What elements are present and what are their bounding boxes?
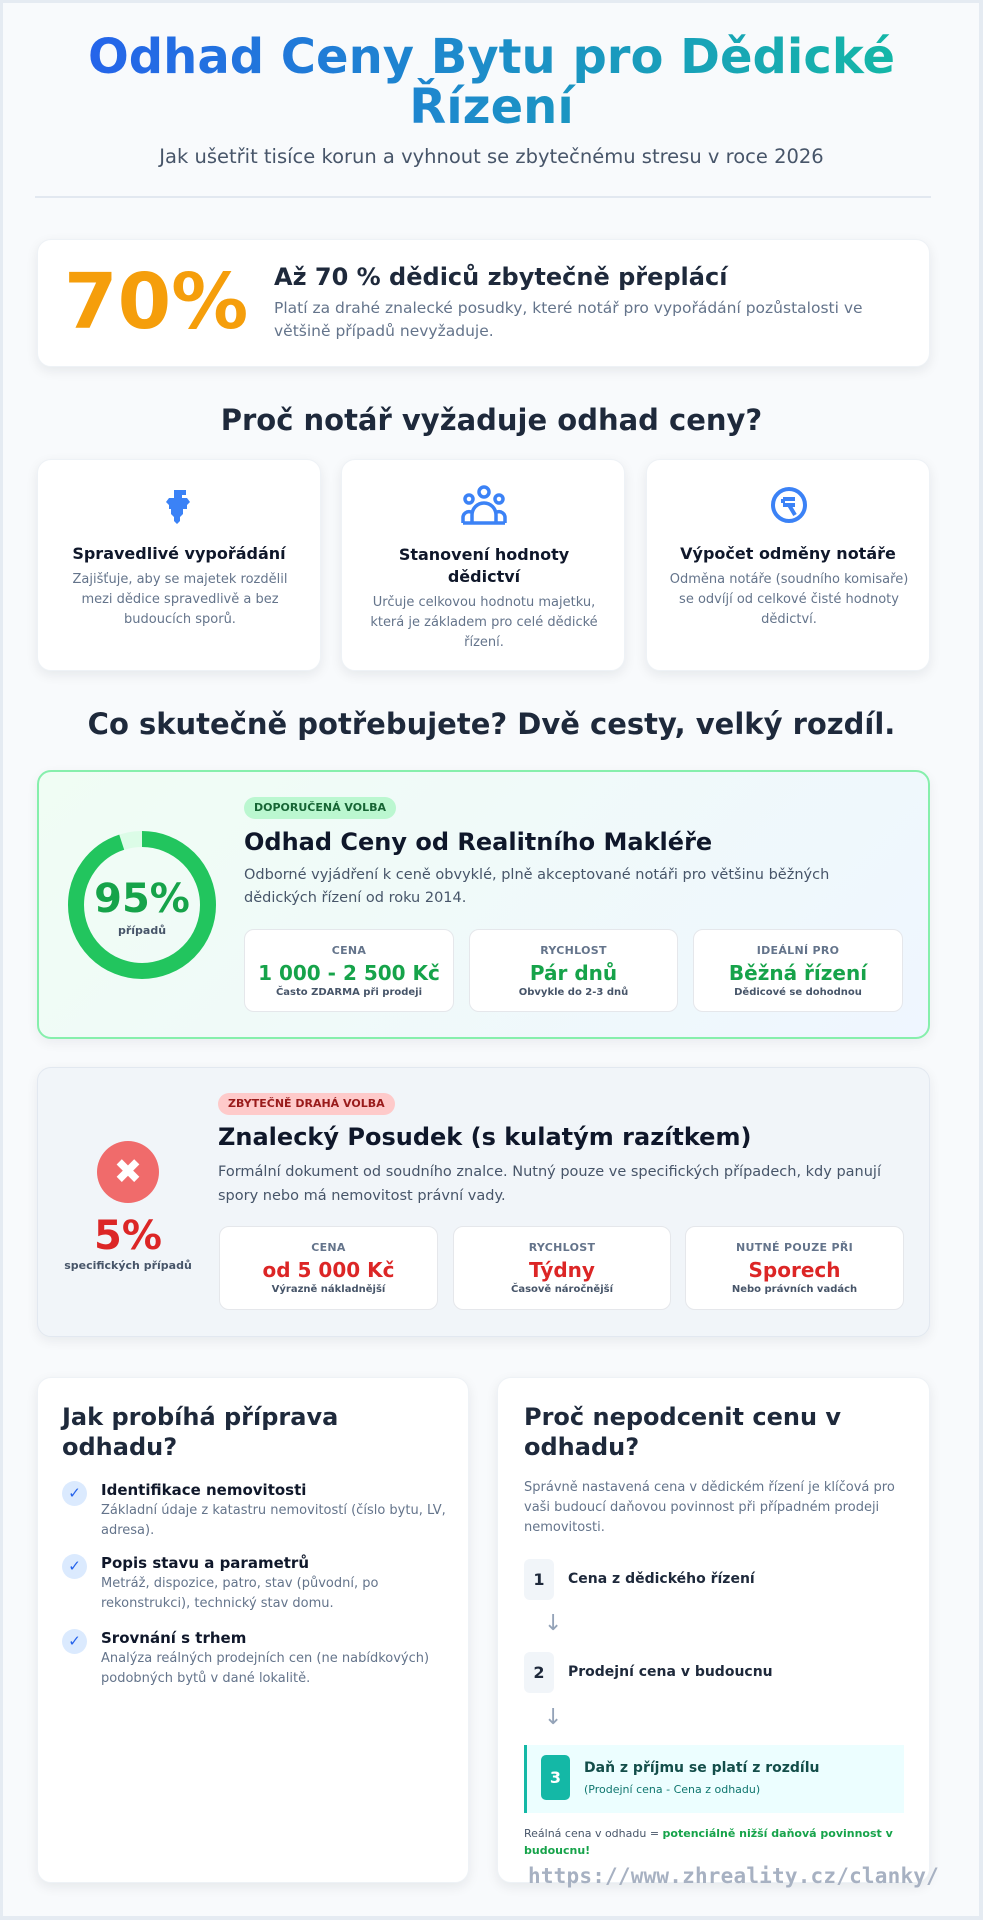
mini: speed: RYCHLOST <box>529 1241 595 1254</box>
card text: Zajišťuje, aby se majetek rozdělil mezi dědice spravedlivě a bez budoucích sporů. <box>73 572 287 627</box>
donut chart 95%: případů <box>118 924 166 937</box>
path text: Odborné vyjádření k ceně obvyklé, plně akceptované notáři pro většinu běžných dědických řízení od roku 2014. <box>244 867 829 906</box>
step 3 highlight: (Prodejní cena - Cena z odhadu) <box>584 1783 760 1796</box>
card title: Stanovení hodnoty dědictví <box>399 545 569 586</box>
item 1: Základní údaje z katastru nemovitostí (číslo bytu, LV, adresa). <box>101 1503 446 1538</box>
panel: expert report (expensive) <box>37 1067 930 1337</box>
stat 5%: specifických případů <box>64 1259 192 1272</box>
mini: ideal for <box>693 929 903 1012</box>
item 2: ✓ <box>68 1557 81 1575</box>
item 3: ✓ <box>68 1632 81 1650</box>
conclusion text: Reálná cena v odhadu = potenciálně nižší daňová povinnost v budoucnu! <box>524 1827 893 1857</box>
heading: why notary: Proč notář vyžaduje odhad ceny? <box>221 403 762 437</box>
badge <box>218 1093 395 1115</box>
mini: price <box>244 929 454 1012</box>
title: Odhad Ceny Bytu pro Dědické Řízení <box>88 29 895 135</box>
donut chart 95%: 95% <box>94 876 190 922</box>
step 3 highlight <box>524 1745 904 1813</box>
item 2: Metráž, dispozice, patro, stav (původní, po rekonstrukci), technický stav domu. <box>101 1576 378 1611</box>
icon: users <box>461 485 507 525</box>
item 3: Srovnání s trhem <box>101 1629 246 1647</box>
mini: ideal for: IDEÁLNÍ PRO <box>757 944 839 957</box>
mini: price: CENA <box>332 944 366 957</box>
panel heading: Jak probíhá příprava odhadu? <box>62 1403 338 1461</box>
panel: fair settlement <box>37 459 321 671</box>
card title: Výpočet odměny notáře <box>680 544 896 563</box>
panel heading: Proč nepodcenit cenu v odhadu? <box>524 1403 841 1461</box>
badge: DOPORUČENÁ VOLBA <box>254 801 386 814</box>
step 1: 1 <box>533 1570 545 1589</box>
panel: value of inheritance <box>341 459 625 671</box>
mini: speed: Pár dnů <box>530 961 617 985</box>
panel: notary fee <box>646 459 930 671</box>
mini: needed: Nebo právních vadách <box>732 1284 857 1295</box>
card text: Odměna notáře (soudního komisaře) se odvíjí od celkové čisté hodnoty dědictví. <box>670 572 908 627</box>
card title: Spravedlivé vypořádání <box>72 544 286 563</box>
badge <box>244 797 396 819</box>
item 1: Identifikace nemovitosti <box>101 1481 306 1499</box>
stat 5% <box>64 1213 192 1272</box>
mini: ideal for: Dědicové se dohodnou <box>734 987 862 998</box>
card text: Určuje celkovou hodnotu majetku, která je základem pro celé dědické řízení. <box>370 595 598 650</box>
mini: speed: RYCHLOST <box>540 944 607 957</box>
step 1: Cena z dědického řízení <box>568 1571 755 1587</box>
mini: speed: Časově náročnější <box>511 1284 613 1295</box>
step 2: 2 <box>533 1663 545 1682</box>
arrow: ↓ <box>544 1705 562 1730</box>
stat card: 70% <box>37 239 930 367</box>
path title: Odhad Ceny od Realitního Makléře <box>244 828 712 856</box>
step 2: Prodejní cena v budoucnu <box>568 1664 773 1680</box>
path text: Formální dokument od soudního znalce. Nutný pouze ve specifických případech, kdy panují spory nebo má nemovitost právní vady. <box>218 1164 881 1204</box>
mini: needed: NUTNÉ POUZE PŘI <box>736 1241 853 1254</box>
mini: speed: Týdny <box>529 1258 595 1282</box>
mini: speed: Obvykle do 2-3 dnů <box>519 987 628 998</box>
item 1 <box>62 1481 446 1538</box>
subtitle: Jak ušetřit tisíce korun a vyhnout se zbytečnému stresu v roce 2026 <box>159 145 824 168</box>
big stat: 70% <box>64 258 248 347</box>
mini: price: CENA <box>311 1241 346 1254</box>
icon: red x <box>97 1141 159 1203</box>
mini: price <box>219 1226 438 1310</box>
panel: preparation process <box>37 1377 469 1883</box>
panel: why not undervalue <box>497 1377 930 1883</box>
item 2 <box>62 1554 378 1611</box>
panel: realtor estimate (recommended) <box>37 770 930 1039</box>
source url: https://www.zhreality.cz/clanky/ <box>528 1864 939 1888</box>
item 1: ✓ <box>68 1484 81 1502</box>
path title: Znalecký Posudek (s kulatým razítkem) <box>218 1123 751 1151</box>
stat text: Platí za drahé znalecké posudky, které notář pro vypořádání pozůstalosti ve většině případů nevyžaduje. <box>274 299 863 340</box>
mini: ideal for: Běžná řízení <box>729 961 867 985</box>
mini: price: 1 000 - 2 500 Kč <box>258 961 440 985</box>
mini: speed <box>469 929 678 1012</box>
icon: coin <box>771 487 807 523</box>
mini: price: od 5 000 Kč <box>263 1258 394 1282</box>
mini: price: Často ZDARMA při prodeji <box>276 987 422 998</box>
icon: red x: ✖ <box>114 1152 142 1192</box>
heading: two paths: Co skutečně potřebujete? Dvě cesty, velký rozdíl. <box>88 707 895 741</box>
stat 5%: 5% <box>94 1213 162 1259</box>
donut chart 95% <box>68 831 216 979</box>
mini: needed <box>685 1226 904 1310</box>
item 2: Popis stavu a parametrů <box>101 1554 309 1572</box>
step 2 <box>524 1652 773 1693</box>
item 3 <box>62 1629 429 1686</box>
stat heading: Až 70 % dědiců zbytečně přeplácí <box>274 263 727 291</box>
arrow: ↓ <box>544 1611 562 1636</box>
mini: speed <box>453 1226 671 1310</box>
step 1 <box>524 1559 756 1600</box>
item 3: Analýza reálných prodejních cen (ne nabídkových) podobných bytů v dané lokalitě. <box>101 1651 429 1686</box>
mini: price: Výrazně nákladnější <box>272 1284 385 1295</box>
intro text: Správně nastavená cena v dědickém řízení je klíčová pro vaši budoucí daňovou povinnost při případném prodeji nemovitosti. <box>524 1480 895 1535</box>
step 3 highlight: Daň z příjmu se platí z rozdílu <box>584 1760 820 1776</box>
mini: needed: Sporech <box>748 1258 840 1282</box>
icon: scale <box>166 490 190 524</box>
badge: ZBYTEČNĚ DRAHÁ VOLBA <box>228 1097 385 1110</box>
step 3 highlight: 3 <box>550 1768 561 1787</box>
